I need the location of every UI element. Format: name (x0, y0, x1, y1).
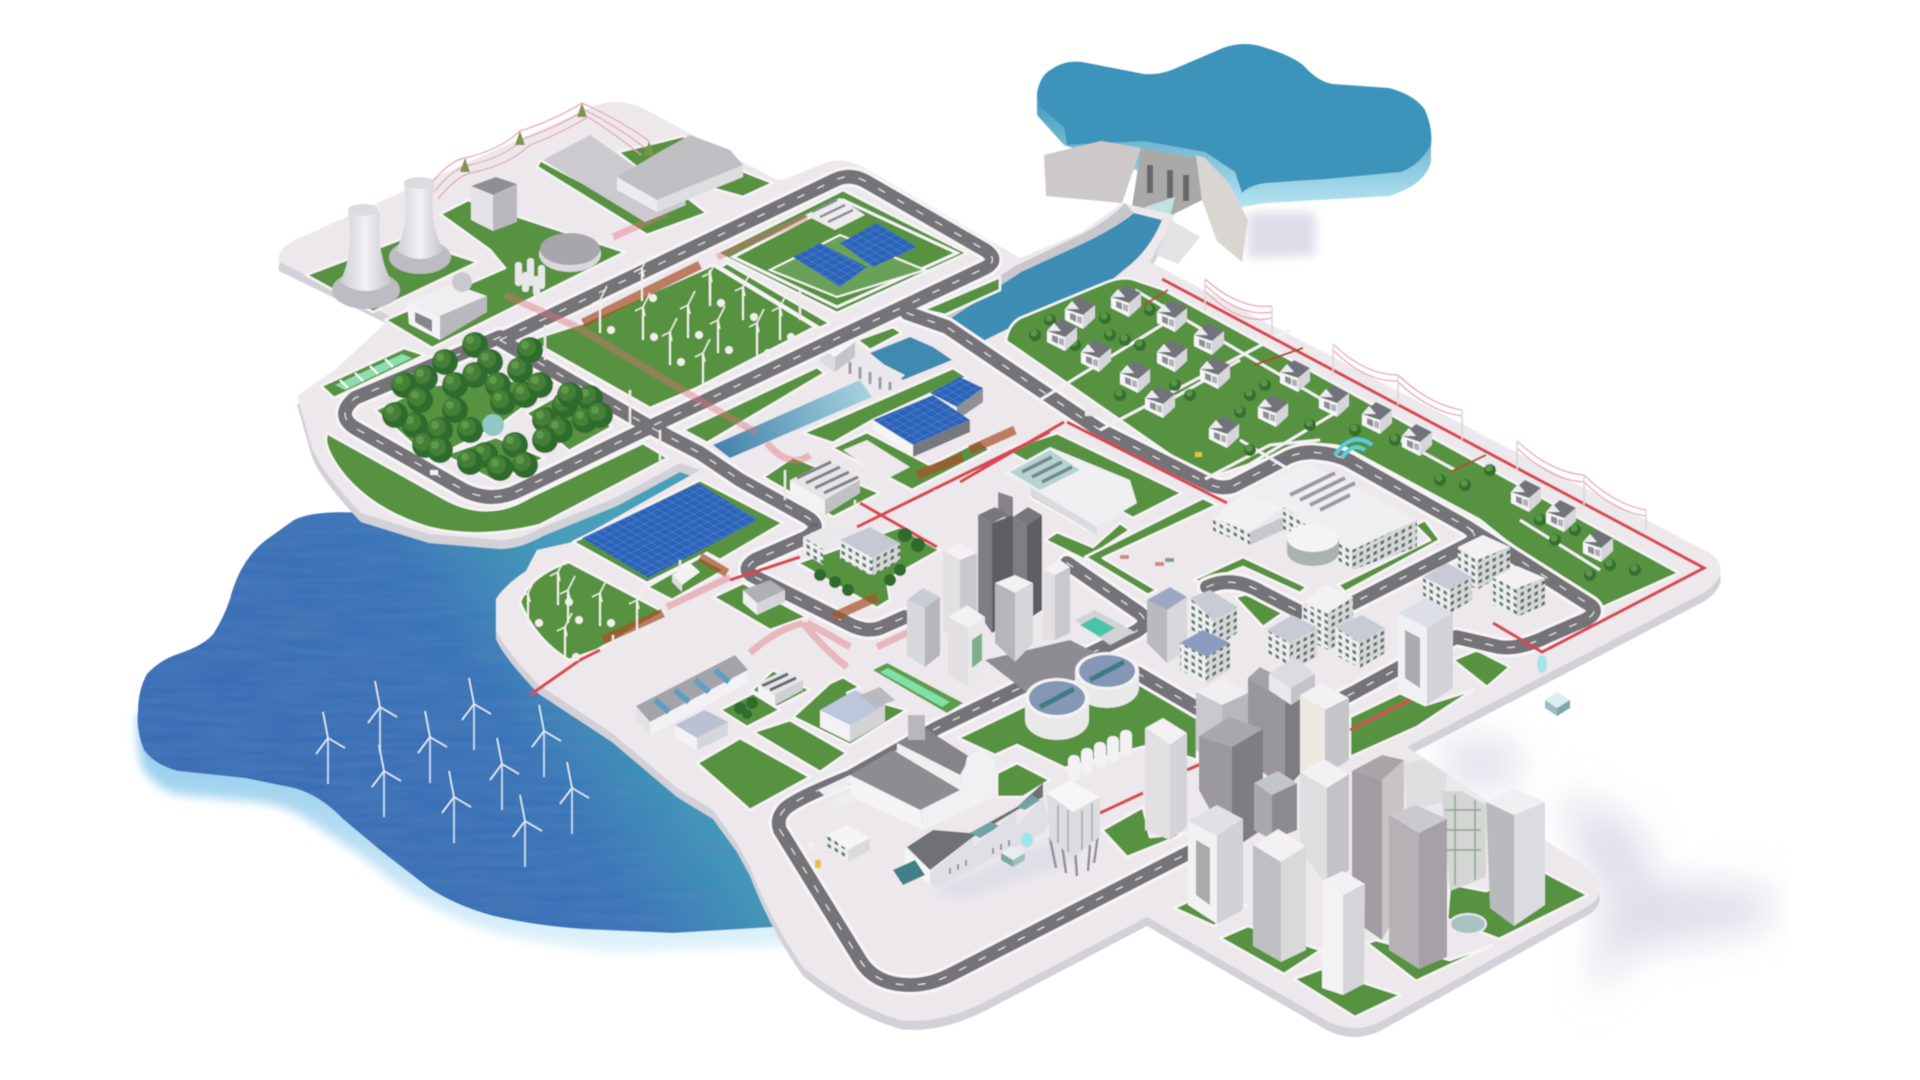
cooling tower front (332, 204, 400, 309)
reservoir rim (1037, 93, 1431, 207)
roof solar office (820, 687, 895, 742)
glass frame tower (1398, 598, 1453, 705)
weir (820, 333, 905, 390)
parking cars (1120, 555, 1174, 566)
reservoir water (1037, 44, 1431, 193)
apartment blocks (1147, 535, 1545, 705)
platform surface (279, 102, 1721, 1028)
offshore wind turbines (316, 678, 589, 867)
solar farms (582, 198, 917, 578)
signal markers (1021, 655, 1547, 847)
solar park frame (717, 190, 967, 313)
road vehicles (430, 408, 1202, 868)
factory complex (818, 715, 1187, 900)
red power lines (530, 279, 1704, 813)
process tower (1047, 780, 1100, 876)
main hall (850, 750, 960, 830)
saw-tooth hall (905, 783, 1080, 900)
rotunda (1287, 524, 1339, 566)
small kiosk and wifi signals (430, 408, 1570, 868)
overhead pylons and wires east (1205, 279, 1646, 530)
houses and garden trees (1029, 285, 1641, 581)
service drops to houses (1144, 290, 1486, 472)
grey block (471, 177, 517, 231)
small stacks (515, 258, 545, 296)
park trees (382, 332, 613, 481)
residential lawn (1006, 278, 1679, 607)
battery storage blocks (636, 655, 963, 750)
main land platform (279, 102, 1721, 1037)
whole scene (138, 44, 1770, 1037)
white slab (1043, 560, 1070, 640)
ev charging (1075, 610, 1135, 645)
nuclear power station (332, 135, 743, 340)
white tower (943, 543, 977, 640)
substation grey frames (790, 460, 860, 515)
residential paths (1040, 290, 1600, 570)
tall white tower (1145, 718, 1187, 840)
small battery unit (1001, 846, 1025, 867)
chimney (908, 715, 925, 740)
office blocks (672, 522, 925, 615)
upper river bank (930, 203, 1134, 322)
central skyscrapers (907, 492, 1135, 695)
tower base shade (985, 640, 1120, 695)
concrete apron (1156, 220, 1200, 264)
round reactor (539, 233, 601, 272)
main facade right (1352, 520, 1417, 570)
ev charging strip (873, 663, 963, 713)
land pylons (545, 270, 935, 660)
helipad (1450, 914, 1486, 934)
tech building (1003, 447, 1137, 535)
sedimentation tanks (1025, 652, 1139, 740)
mid tower (995, 575, 1033, 662)
green plots (306, 136, 1679, 1017)
dam right wall (1196, 155, 1248, 262)
sea with offshore area (138, 460, 790, 953)
platform edge (279, 111, 1721, 1037)
spire (998, 492, 1013, 520)
small factory (743, 580, 785, 615)
downtown towers (1188, 657, 1545, 995)
upper river (945, 213, 1162, 345)
main facade left (1283, 507, 1352, 570)
transmission lines (430, 103, 1704, 813)
main roof (1243, 463, 1417, 550)
truck (893, 860, 925, 885)
hut near solar (672, 563, 700, 592)
wing walls (1213, 518, 1250, 545)
solar panels upper (840, 223, 917, 267)
turbine hall lower (543, 135, 686, 222)
wifi arcs (1335, 439, 1372, 458)
small office (827, 825, 870, 862)
city lawns (1174, 871, 1588, 1017)
silos (1068, 730, 1132, 781)
warehouses with solar roofs (873, 377, 983, 457)
mid canal (713, 380, 872, 458)
trailers (818, 775, 872, 810)
floating kiosk (1545, 692, 1570, 716)
dam spillway (1131, 148, 1202, 224)
sea surface (138, 460, 790, 933)
side tower (923, 750, 995, 830)
waterways (713, 203, 1200, 458)
soft ground shadows (1445, 740, 1770, 1000)
wing roof (1213, 493, 1283, 532)
rust and pink power corridors (505, 213, 1015, 667)
rooftop plant (1290, 473, 1355, 510)
control building (407, 272, 487, 340)
glass tower (907, 588, 940, 667)
dark trees in small plot (734, 697, 758, 719)
data centre campus (1003, 447, 1417, 570)
onshore wind turbines (520, 254, 795, 661)
road network (345, 177, 1594, 985)
sea rim (138, 712, 790, 953)
solar panels large (582, 483, 758, 578)
cooling tower rear (389, 177, 451, 274)
dark towers (978, 507, 1013, 633)
reservoir and dam (1037, 44, 1431, 262)
substation near solar (805, 198, 865, 230)
turbine hall upper (617, 135, 743, 212)
front tower (948, 605, 985, 687)
upper hall (897, 727, 970, 790)
dam shadow (1248, 213, 1315, 258)
parking strip west (321, 348, 425, 398)
pond behind weir (870, 337, 952, 380)
overhead pylons and wires north (430, 103, 654, 199)
dam left wall (1044, 141, 1141, 203)
